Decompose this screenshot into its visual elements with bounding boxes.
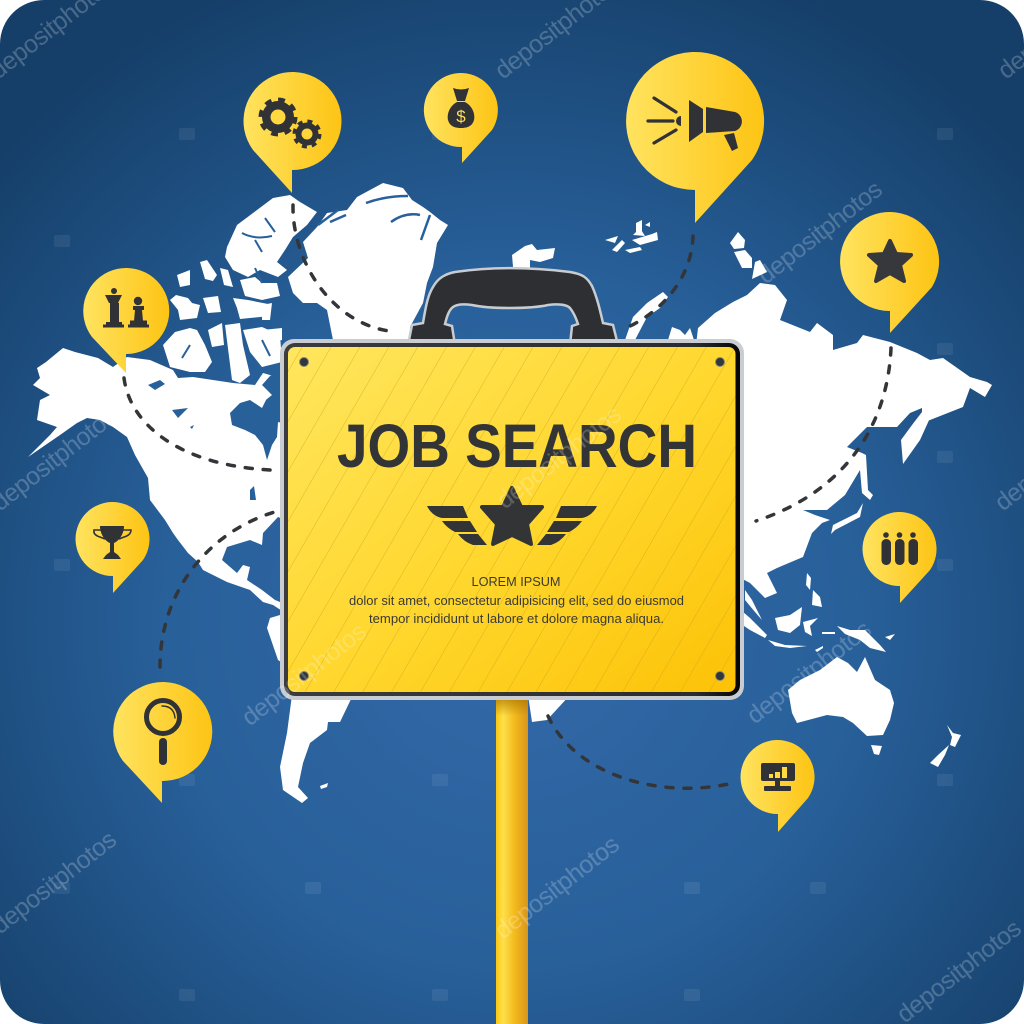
pin: people: [863, 512, 937, 603]
Kamchatka: [901, 412, 930, 464]
signpost pole: [496, 698, 528, 1024]
Greenland: [288, 183, 448, 345]
icon: gears: [261, 100, 320, 146]
Tasmania: [871, 745, 882, 755]
icon: megaphone: [648, 98, 742, 151]
watermarks: depositphotos: [491, 400, 627, 515]
icon: magnifier: [146, 700, 180, 765]
dashed connectors: [124, 205, 891, 788]
icon: chess pieces: [103, 288, 149, 328]
pin: money bag: [424, 73, 498, 163]
body text: dolor sit amet, consectetur adipisicing elit, sed do eiusmod: [349, 593, 684, 608]
pin: magnifier: [113, 682, 212, 803]
Svalbard: [605, 220, 658, 253]
South America: [267, 612, 387, 803]
watermarks: depositphotos: [489, 830, 625, 945]
sign frame: [280, 339, 744, 700]
Great lakes and inland water: [148, 380, 256, 500]
Africa: [528, 695, 570, 722]
South East Asia: [735, 573, 895, 652]
pin: megaphone: [626, 52, 764, 223]
icon: monitor chart: [761, 763, 795, 791]
Novaya Zemlya: [730, 232, 767, 279]
pin: star: [840, 212, 939, 333]
pin: monitor: [741, 740, 815, 832]
Eurasia: [696, 283, 992, 598]
pin: gears: [243, 72, 341, 193]
camera watermark marks: [54, 128, 953, 1001]
world map: [28, 183, 992, 803]
Iceland: [512, 244, 555, 268]
icon: star: [869, 241, 911, 281]
Hudson Bay: [230, 372, 290, 460]
icon: money bag: $: [456, 107, 466, 126]
pin: trophy: [76, 502, 150, 593]
icon: trophy: [94, 526, 131, 559]
New Zealand: [930, 725, 961, 767]
yellow sign: [280, 339, 744, 700]
pin: chess: [83, 268, 169, 373]
sign plate: [288, 347, 736, 692]
body text: [349, 574, 684, 626]
heading: JOB SEARCH: [337, 412, 697, 480]
watermarks: depositphotos: [741, 615, 877, 730]
Arctic islands: [163, 195, 317, 403]
North America: [28, 348, 290, 616]
body text: LOREM IPSUM: [472, 574, 560, 589]
Scandinavia: [625, 292, 668, 340]
watermarks: depositphotos: [752, 175, 888, 290]
Japan: [831, 503, 863, 534]
watermarks: depositphotos: [236, 617, 372, 732]
icon: winged star: [427, 488, 597, 545]
body text: tempor incididunt ut labore et dolore magna aliqua.: [369, 611, 664, 626]
rivets: [300, 358, 724, 680]
briefcase handle: [408, 268, 618, 345]
icon: people: [882, 532, 918, 565]
Australia: [788, 657, 894, 736]
